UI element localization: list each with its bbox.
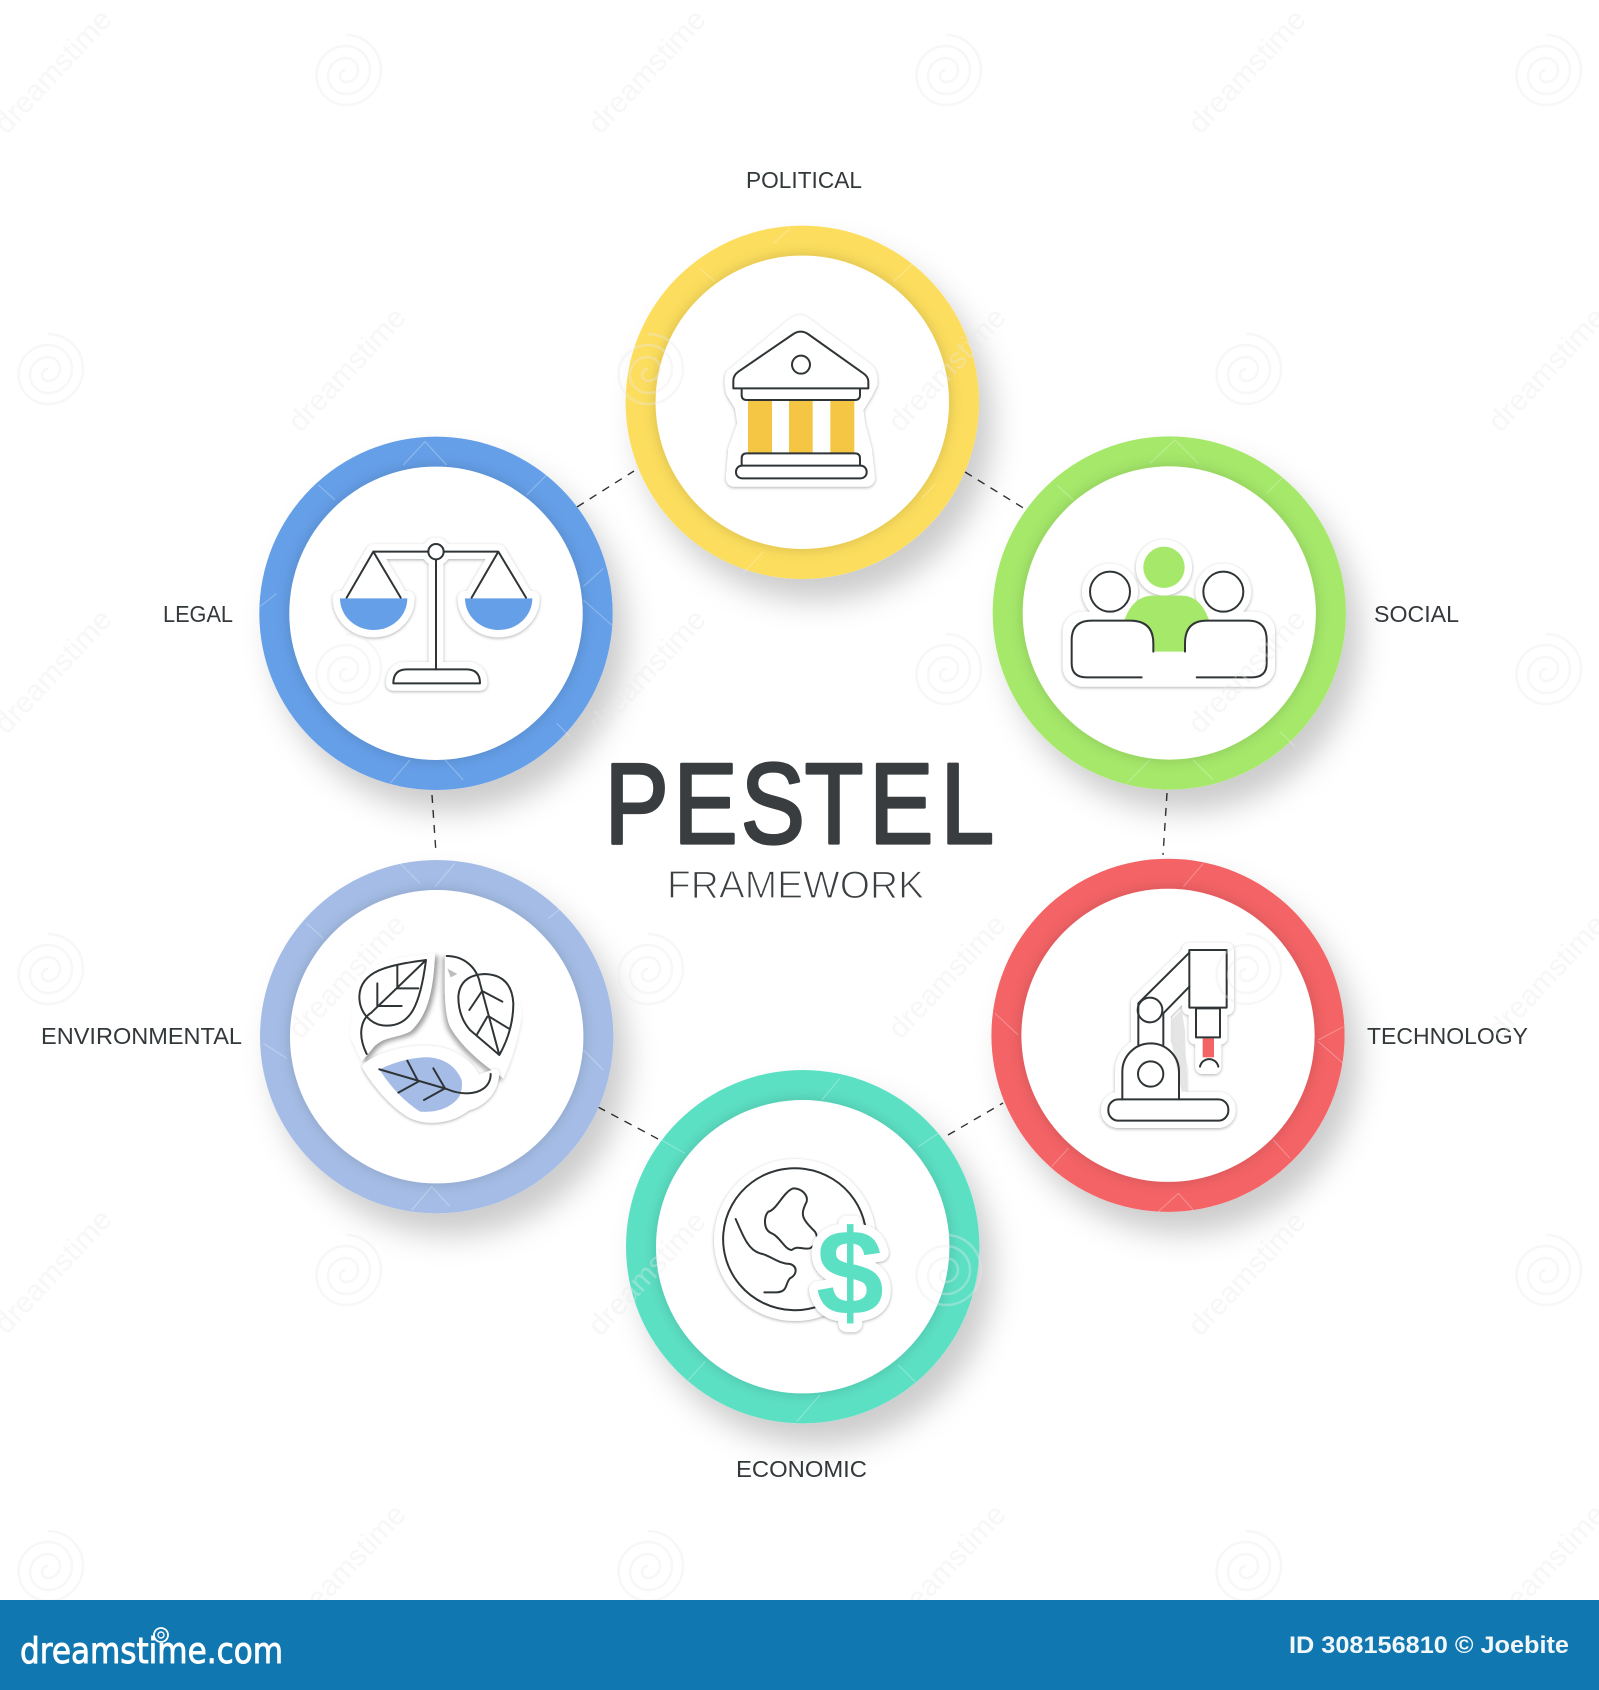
panel: political circle — [626, 226, 979, 579]
title: PESTEL: PESTEL — [605, 741, 994, 868]
watermark: spirals and diagonal text: dreamstime — [882, 301, 1013, 438]
footer logo: dreamstime.com: dreamstime.com — [20, 1631, 283, 1672]
label: economic: ECONOMIC — [736, 1456, 867, 1482]
footer bar — [0, 1600, 1599, 1690]
label: environmental: ENVIRONMENTAL — [41, 1023, 242, 1049]
watermark: spirals and diagonal text: dreamstime — [582, 1205, 713, 1342]
watermark: spirals and diagonal text: dreamstime — [582, 3, 713, 140]
icon: globe with dollar sign — [714, 1159, 884, 1341]
panel: economic circle — [626, 1070, 979, 1423]
panel: technology circle — [991, 859, 1345, 1212]
icon: three leaves cycle — [350, 953, 522, 1118]
dashed connectors between circles — [432, 471, 1167, 1140]
watermark: spirals and diagonal text: dreamstime — [282, 908, 413, 1045]
watermark: spirals and diagonal text: dreamstime — [282, 301, 413, 438]
icon: government building — [725, 315, 877, 487]
panel: social circle — [993, 436, 1346, 790]
icon: balance scales — [340, 544, 532, 683]
watermark: diagonal hairlines across rings — [260, 228, 1343, 1422]
panel: environmental circle — [260, 860, 613, 1213]
watermark: spirals and diagonal text: dreamstime — [1182, 3, 1313, 140]
subtitle: FRAMEWORK: FRAMEWORK — [667, 864, 924, 907]
watermark: spirals and diagonal text: dreamstime — [882, 1498, 1013, 1635]
label: political: POLITICAL — [746, 167, 862, 193]
label: legal: LEGAL — [163, 601, 233, 627]
icon: globe with dollar sign: $ — [816, 1205, 884, 1341]
panel: legal circle — [259, 437, 613, 790]
watermark: spirals and diagonal text: dreamstime — [1182, 1205, 1313, 1342]
watermark: spirals and diagonal text: dreamstime — [282, 1498, 413, 1635]
watermark: spirals and diagonal text: dreamstime — [1182, 603, 1313, 740]
watermark: spirals and diagonal text: dreamstime — [582, 603, 713, 740]
icon: robotic arm — [1108, 950, 1228, 1121]
label: technology: TECHNOLOGY — [1367, 1023, 1528, 1049]
footer image id and credit: ID 308156810 © Joebite — [1289, 1632, 1569, 1659]
label: social: SOCIAL — [1374, 601, 1459, 627]
watermark: spirals and diagonal text: dreamstime — [882, 908, 1013, 1045]
icon: group of people — [1063, 539, 1275, 687]
